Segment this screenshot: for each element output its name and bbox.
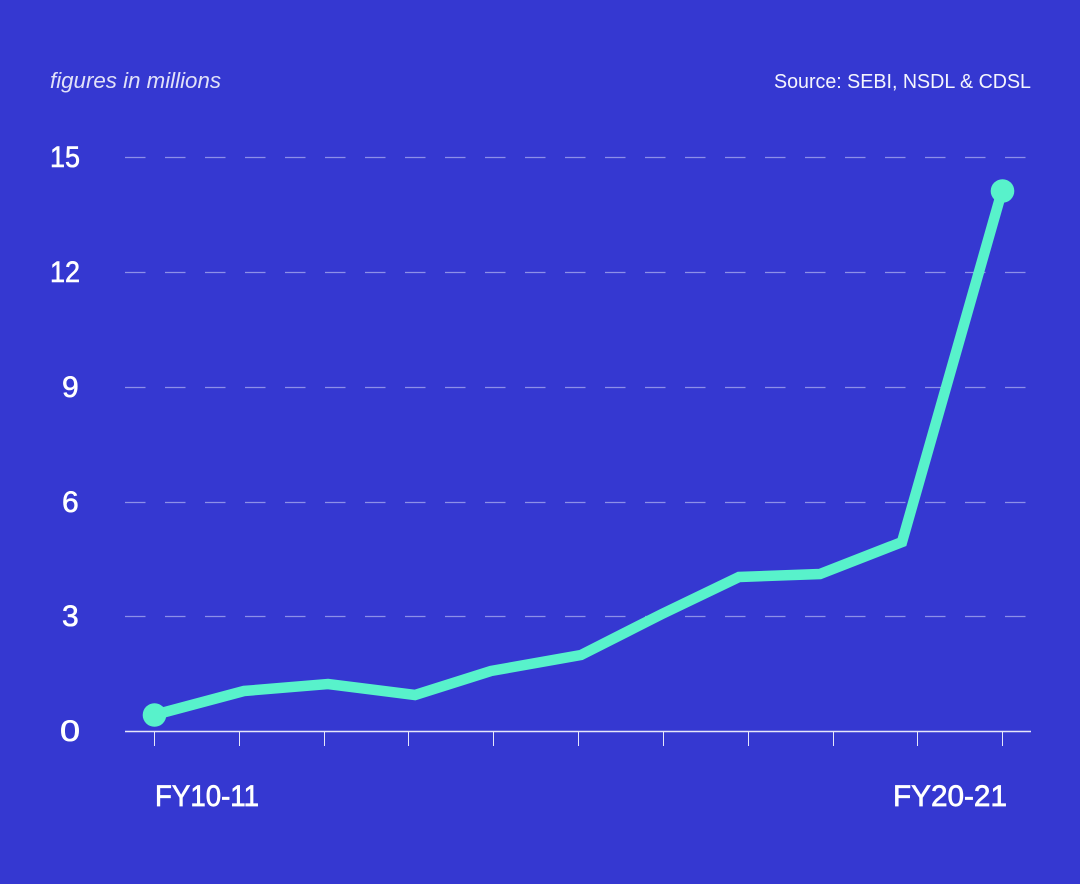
end point — [991, 179, 1014, 203]
y axis labels: 6 — [62, 486, 79, 519]
x axis label end: FY20-21 — [893, 780, 1007, 813]
y axis labels — [50, 141, 80, 748]
note: figures in millions: figures in millions — [50, 68, 221, 93]
y axis labels: 9 — [62, 371, 79, 404]
y axis labels: 15 — [50, 141, 80, 174]
start point — [143, 703, 166, 727]
source note: Source: SEBI, NSDL & CDSL — [774, 71, 1031, 93]
data line — [143, 179, 1014, 727]
y axis labels: 12 — [50, 256, 80, 289]
y axis labels: 0 — [60, 715, 80, 748]
x axis label start: FY10-11 — [155, 780, 259, 813]
y axis labels: 3 — [62, 600, 79, 633]
